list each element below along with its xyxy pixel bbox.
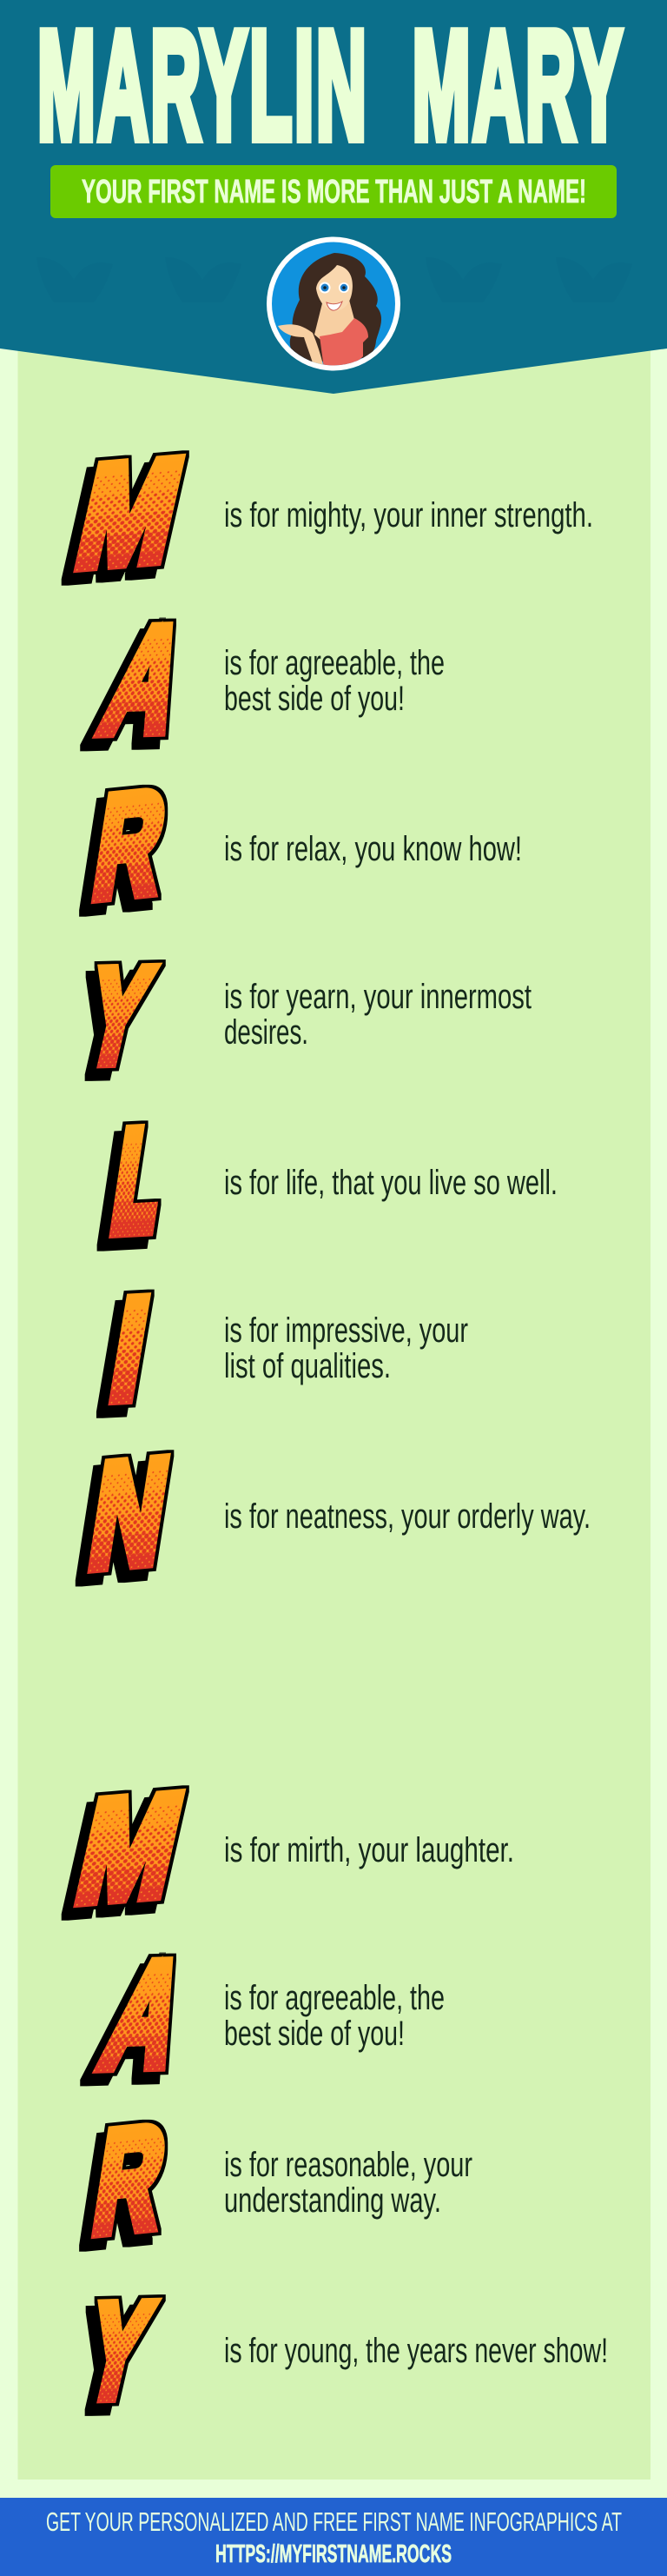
panel: letters background (17, 330, 650, 2480)
letter Y: Y (73, 939, 163, 1092)
title: MARYLIN MARY (37, 1, 624, 172)
text: yearn (224, 978, 532, 1052)
footer text: url: HTTPS://MYFIRSTNAME.ROCKS (215, 2540, 452, 2568)
letter M: M (65, 428, 195, 597)
text: agreeable (second name): best side of you! (224, 2015, 405, 2053)
text: agreeable (second name) (224, 1979, 445, 2053)
icon: avatar of a smiling woman (267, 236, 400, 370)
letter L: L (106, 1102, 170, 1258)
text: reasonable: is for reasonable, your (224, 2146, 472, 2184)
text: mirth: is for mirth, your laughter. (224, 1831, 514, 1869)
text: agreeable: best side of you! (224, 680, 405, 718)
letter A: A (88, 596, 203, 764)
text: reasonable: understanding way. (224, 2181, 441, 2220)
text: impressive: list of qualities. (224, 1347, 391, 1385)
text: agreeable (second name): is for agreeable, the (224, 1979, 445, 2017)
footer bar (0, 2498, 667, 2576)
letter R (second name): R (85, 2095, 175, 2264)
letter M (second name): M (65, 1763, 195, 1932)
text: agreeable: is for agreeable, the (224, 644, 445, 682)
letter I: I (102, 1268, 158, 1430)
letter A (second name): A (88, 1931, 203, 2099)
text: relax: is for relax, you know how! (224, 830, 522, 868)
text: agreeable (224, 644, 445, 718)
text: yearn: is for yearn, your innermost (224, 978, 532, 1016)
text: impressive: is for impressive, your (224, 1311, 468, 1350)
letter Y (second name): Y (73, 2274, 163, 2427)
letter N: N (81, 1427, 177, 1599)
text: impressive (224, 1311, 468, 1385)
subtitle banner (50, 165, 617, 218)
letter R: R (85, 760, 175, 929)
text: reasonable (224, 2146, 472, 2220)
text: yearn: desires. (224, 1013, 308, 1052)
header: teal chevron banner (0, 0, 667, 394)
